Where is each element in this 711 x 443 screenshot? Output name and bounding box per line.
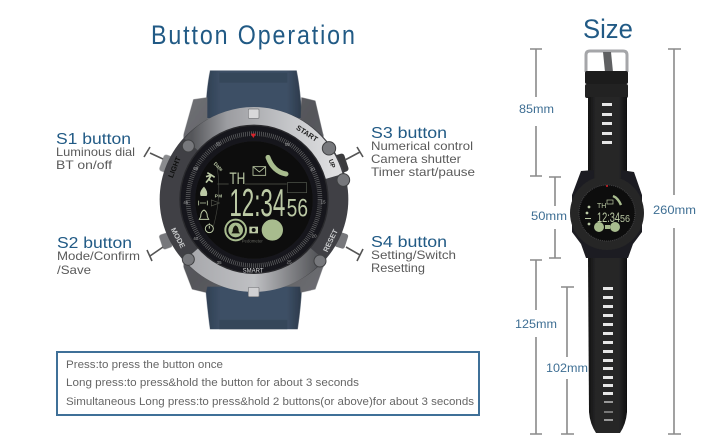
S3 button label: Timer start/pause [371, 165, 475, 179]
lcd dial [195, 141, 313, 259]
lcd clock readout [212, 161, 308, 225]
inner bezel [180, 125, 328, 273]
S4 button label: Setting/Switch [371, 248, 456, 262]
scale numbers: 55 [216, 142, 221, 147]
panel: press legend [57, 352, 479, 415]
S4 leader line [346, 247, 363, 261]
lcd clock readout: Date [212, 161, 224, 173]
lcd readout: TH [597, 203, 606, 210]
button S1 [159, 154, 173, 173]
lcd clock readout: 56 [287, 196, 308, 223]
S2 button label: /Save [57, 263, 91, 277]
dimension: 50mm [531, 177, 567, 258]
S4 button label: Resetting [371, 261, 425, 275]
bezel labels: START [295, 123, 320, 144]
dimension: 125mm [515, 260, 557, 434]
icon: bell [199, 210, 209, 219]
dimension: 102mm [546, 287, 588, 434]
panel: press legend: Long press:to press&hold the button for about 3 seconds [66, 377, 360, 389]
S1 button label: S1 button [56, 131, 131, 148]
dimension: 260mm: 260mm [653, 203, 696, 217]
case [572, 170, 642, 258]
S3 button label [371, 125, 475, 179]
bezel [570, 176, 644, 250]
dimension: 260mm [653, 49, 696, 434]
dimension: 125mm: 125mm [515, 317, 557, 331]
scale numbers: 35 [217, 260, 222, 265]
scale numbers [183, 142, 326, 265]
watch strap top [205, 71, 302, 118]
scale numbers: 50 [193, 166, 199, 171]
bezel labels [166, 123, 340, 275]
icon: runner [206, 173, 215, 183]
S1 button label: Luminous dial [56, 145, 135, 159]
gauge circles [594, 222, 620, 232]
S3 button label: S3 button [371, 125, 447, 142]
status box [287, 183, 307, 193]
watch strap bottom [205, 287, 302, 329]
lcd clock readout: 12:34 [229, 181, 285, 225]
S2 button label: S2 button [57, 235, 132, 252]
icon: stopwatch [205, 223, 213, 233]
small pedometer label: Pedometer [242, 239, 263, 244]
polished bottom arc [192, 253, 317, 282]
upper strap holes [602, 103, 612, 144]
main blue watch illustration [159, 71, 350, 329]
lcd readout: 12:34 [597, 209, 620, 225]
phone icon [613, 196, 621, 205]
S2 button label [57, 235, 140, 277]
strap texture [219, 73, 287, 83]
S2 leader line [147, 247, 163, 261]
panel: press legend: Simultaneous Long press:to press&hold 2 buttons(or above)for about 3 seconds [66, 396, 475, 408]
arc divider [213, 168, 219, 227]
lower strap holes [603, 287, 613, 421]
bezel labels: LIGHT [166, 155, 183, 179]
icon: distance [199, 201, 207, 205]
notch top [248, 109, 259, 118]
circle gauge right [261, 219, 283, 241]
screws [182, 140, 350, 267]
button S2 [159, 232, 173, 250]
bezel labels: SMART [243, 269, 264, 275]
dimension: 50mm: 50mm [531, 209, 567, 223]
buckle [586, 51, 627, 72]
circle gauge left [225, 220, 246, 240]
lcd clock readout: TH [229, 169, 245, 188]
S4 button label [371, 234, 456, 275]
left icons [585, 206, 591, 225]
S3 button label: Numerical control [371, 139, 473, 153]
title: Button Operation: Button Operation [151, 20, 357, 50]
icon: arrow outline [211, 200, 219, 206]
lcd readout: 56 [620, 214, 630, 225]
icon: camera [249, 227, 258, 233]
S3 button label: Camera shutter [371, 152, 461, 166]
button S4 [334, 231, 349, 249]
notch bottom [248, 287, 259, 297]
S4 button label: S4 button [371, 234, 447, 251]
S1 button label: BT on/off [56, 158, 113, 172]
tick ring [188, 134, 320, 266]
bezel labels: UP [327, 158, 336, 169]
black watch side illustration [570, 51, 644, 433]
scale numbers: 15 [321, 199, 326, 204]
icon: envelope [253, 167, 266, 175]
divider line [217, 183, 287, 185]
S1 button label [56, 131, 135, 172]
lower strap [588, 255, 627, 433]
scale numbers: 25 [287, 259, 292, 264]
dimension: 102mm: 102mm [546, 361, 588, 375]
watch case lugs [183, 97, 323, 293]
title: Size: Size [583, 13, 633, 44]
icon: flame [200, 187, 207, 196]
envelope icon [607, 200, 613, 204]
red marker [606, 185, 608, 187]
bezel base [160, 107, 348, 291]
S3 leader line [345, 147, 363, 160]
bezel labels: RESET [321, 227, 340, 254]
scale numbers: 10 [310, 167, 315, 172]
polished top arc [192, 117, 333, 177]
dimension: 85mm: 85mm [519, 102, 554, 116]
scale numbers: 40 [193, 236, 199, 241]
icon: phone [268, 157, 286, 174]
S2 button label: Mode/Confirm [57, 249, 140, 263]
dimension: 85mm [519, 49, 554, 176]
button S3 [333, 153, 349, 174]
red marker [251, 134, 256, 138]
scale numbers: 20 [312, 233, 317, 238]
bezel labels: MODE [169, 226, 187, 250]
panel: press legend: Press:to press the button once [66, 359, 223, 371]
dial [579, 185, 635, 241]
lcd clock readout: PM [215, 193, 222, 199]
upper strap [588, 97, 627, 179]
scale numbers: 05 [285, 142, 290, 147]
S1 leader line [144, 147, 163, 159]
scale numbers: 45 [183, 200, 189, 205]
keeper [585, 71, 628, 98]
